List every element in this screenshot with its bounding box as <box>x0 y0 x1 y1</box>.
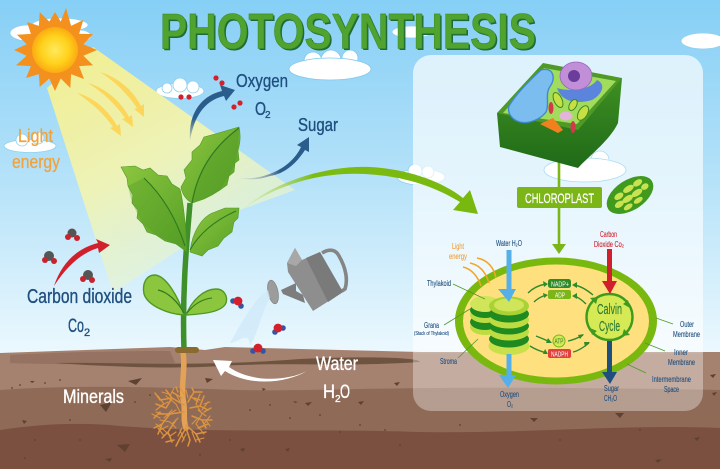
label: oxygen: Oxygen <box>236 70 288 91</box>
stem <box>184 203 190 350</box>
diagram labels: Thylakoid <box>427 278 451 288</box>
lower right leaf <box>190 208 239 256</box>
label: oxygen <box>236 70 288 121</box>
label: light energy: energy <box>12 152 60 172</box>
diagram labels <box>414 229 700 409</box>
water arrow in diagram <box>498 250 516 388</box>
water molecules <box>230 297 286 354</box>
root collar <box>175 347 199 353</box>
cloud top right of title <box>392 26 720 49</box>
grana back stack <box>470 296 500 335</box>
ATP badge: ATP <box>554 338 564 346</box>
diagram labels: Sugar <box>604 383 619 393</box>
nucleus body <box>560 62 592 90</box>
chloroplast label <box>517 187 602 208</box>
label: oxygen: O <box>255 98 266 119</box>
diagram labels: O₂ <box>507 399 513 409</box>
calvin cycle: Calvin <box>597 301 622 318</box>
nucleus core <box>568 70 580 82</box>
cloud behind light label <box>4 132 56 152</box>
diagram labels: Inner <box>674 347 688 357</box>
NADP+ pill: NADP+ <box>551 282 569 288</box>
diagram labels: Dioxide Co₂ <box>594 239 624 249</box>
diagram labels: CH₂O <box>604 393 617 403</box>
diagram labels: Space <box>664 384 679 394</box>
outer membrane <box>455 258 657 384</box>
title: PHOTOSYNTHESIS <box>162 5 538 61</box>
label: water: O <box>340 382 350 403</box>
label: water: H <box>323 382 335 403</box>
diagram labels: Stroma <box>440 356 457 366</box>
right small leaf <box>186 289 227 315</box>
label: water <box>316 354 359 405</box>
label: light energy <box>12 126 60 172</box>
oxygen molecules <box>178 75 243 110</box>
ADP pill <box>548 290 571 300</box>
sky background <box>0 0 720 360</box>
small cycle arrows <box>528 284 593 353</box>
connector lines <box>558 160 560 248</box>
water spray <box>230 290 270 345</box>
leader lines <box>444 284 673 373</box>
diagram labels: Carbon <box>600 229 617 239</box>
sun <box>14 8 97 91</box>
green arrow into chloroplast <box>552 244 566 254</box>
roots <box>152 352 212 446</box>
light beam <box>47 47 295 293</box>
calvin cycle: Cycle <box>599 318 620 335</box>
label: water: Water <box>316 354 359 375</box>
diagram labels: energy <box>449 252 467 261</box>
panel: chloroplast detail <box>242 55 703 411</box>
vacuole <box>509 69 553 123</box>
chloroplast label: CHLOROPLAST <box>525 190 594 206</box>
label: water: 2 <box>335 394 341 405</box>
diagram labels: Grana <box>424 320 439 330</box>
calvin cycle <box>586 294 632 340</box>
left small leaf <box>143 275 184 315</box>
cloud near oxygen <box>156 78 204 98</box>
diagram labels: Membrane <box>673 329 700 339</box>
label: light energy: Light <box>18 126 53 146</box>
upper right leaf <box>181 127 240 203</box>
title: PHOTOSYNTHESIS <box>160 4 536 60</box>
grana front stack <box>488 296 530 355</box>
carbon dioxide molecules <box>42 228 95 283</box>
stroma <box>463 264 649 378</box>
light rays in diagram <box>463 258 496 286</box>
NADPH pill <box>548 349 571 358</box>
cloud behind sun <box>10 18 91 42</box>
carbon dioxide arrow in diagram <box>602 249 617 294</box>
water arrow <box>213 360 307 382</box>
label: sugar: Sugar <box>298 114 338 135</box>
label: carbon dioxide: 2 <box>84 327 90 339</box>
diagram labels: (Stack of Thylakoid) <box>414 331 449 337</box>
ADP pill: ADP <box>555 292 565 300</box>
label: carbon dioxide: Co <box>68 316 84 337</box>
diagram labels: Membrane <box>668 357 695 367</box>
label: carbon dioxide: Carbon dioxide <box>27 286 132 308</box>
soil <box>0 347 720 469</box>
watering can <box>266 248 346 311</box>
carbon dioxide arrow <box>54 239 110 286</box>
cloud under title <box>289 50 371 80</box>
sugar arrow in diagram <box>602 341 617 384</box>
diagram labels: Light <box>452 242 465 251</box>
chloroplast icon <box>600 168 660 222</box>
label: oxygen: 2 <box>265 110 271 121</box>
plant <box>121 127 240 353</box>
cloud in panel <box>544 151 626 182</box>
plant cell model <box>497 62 622 168</box>
label: minerals: Minerals <box>63 387 124 408</box>
diagram labels: Outer <box>680 319 694 329</box>
organelles <box>551 91 565 109</box>
cloud left of panel <box>397 164 445 185</box>
label: carbon dioxide <box>27 286 132 339</box>
sugar arrow <box>237 137 309 179</box>
chloroplast diagram <box>455 249 657 388</box>
oxygen arrow <box>190 85 235 141</box>
big green arrow <box>242 167 478 214</box>
light rays <box>77 72 144 136</box>
upper left leaf <box>121 166 187 252</box>
NADPH pill: NADPH <box>551 352 568 358</box>
NADP+ pill <box>548 279 571 288</box>
diagram labels: Water H₂O <box>496 238 522 248</box>
endoplasmic reticulum <box>557 80 602 102</box>
diagram labels: Oxygen <box>500 389 519 399</box>
ATP badge <box>553 335 565 347</box>
diagram labels: Intermembrane <box>652 374 691 384</box>
